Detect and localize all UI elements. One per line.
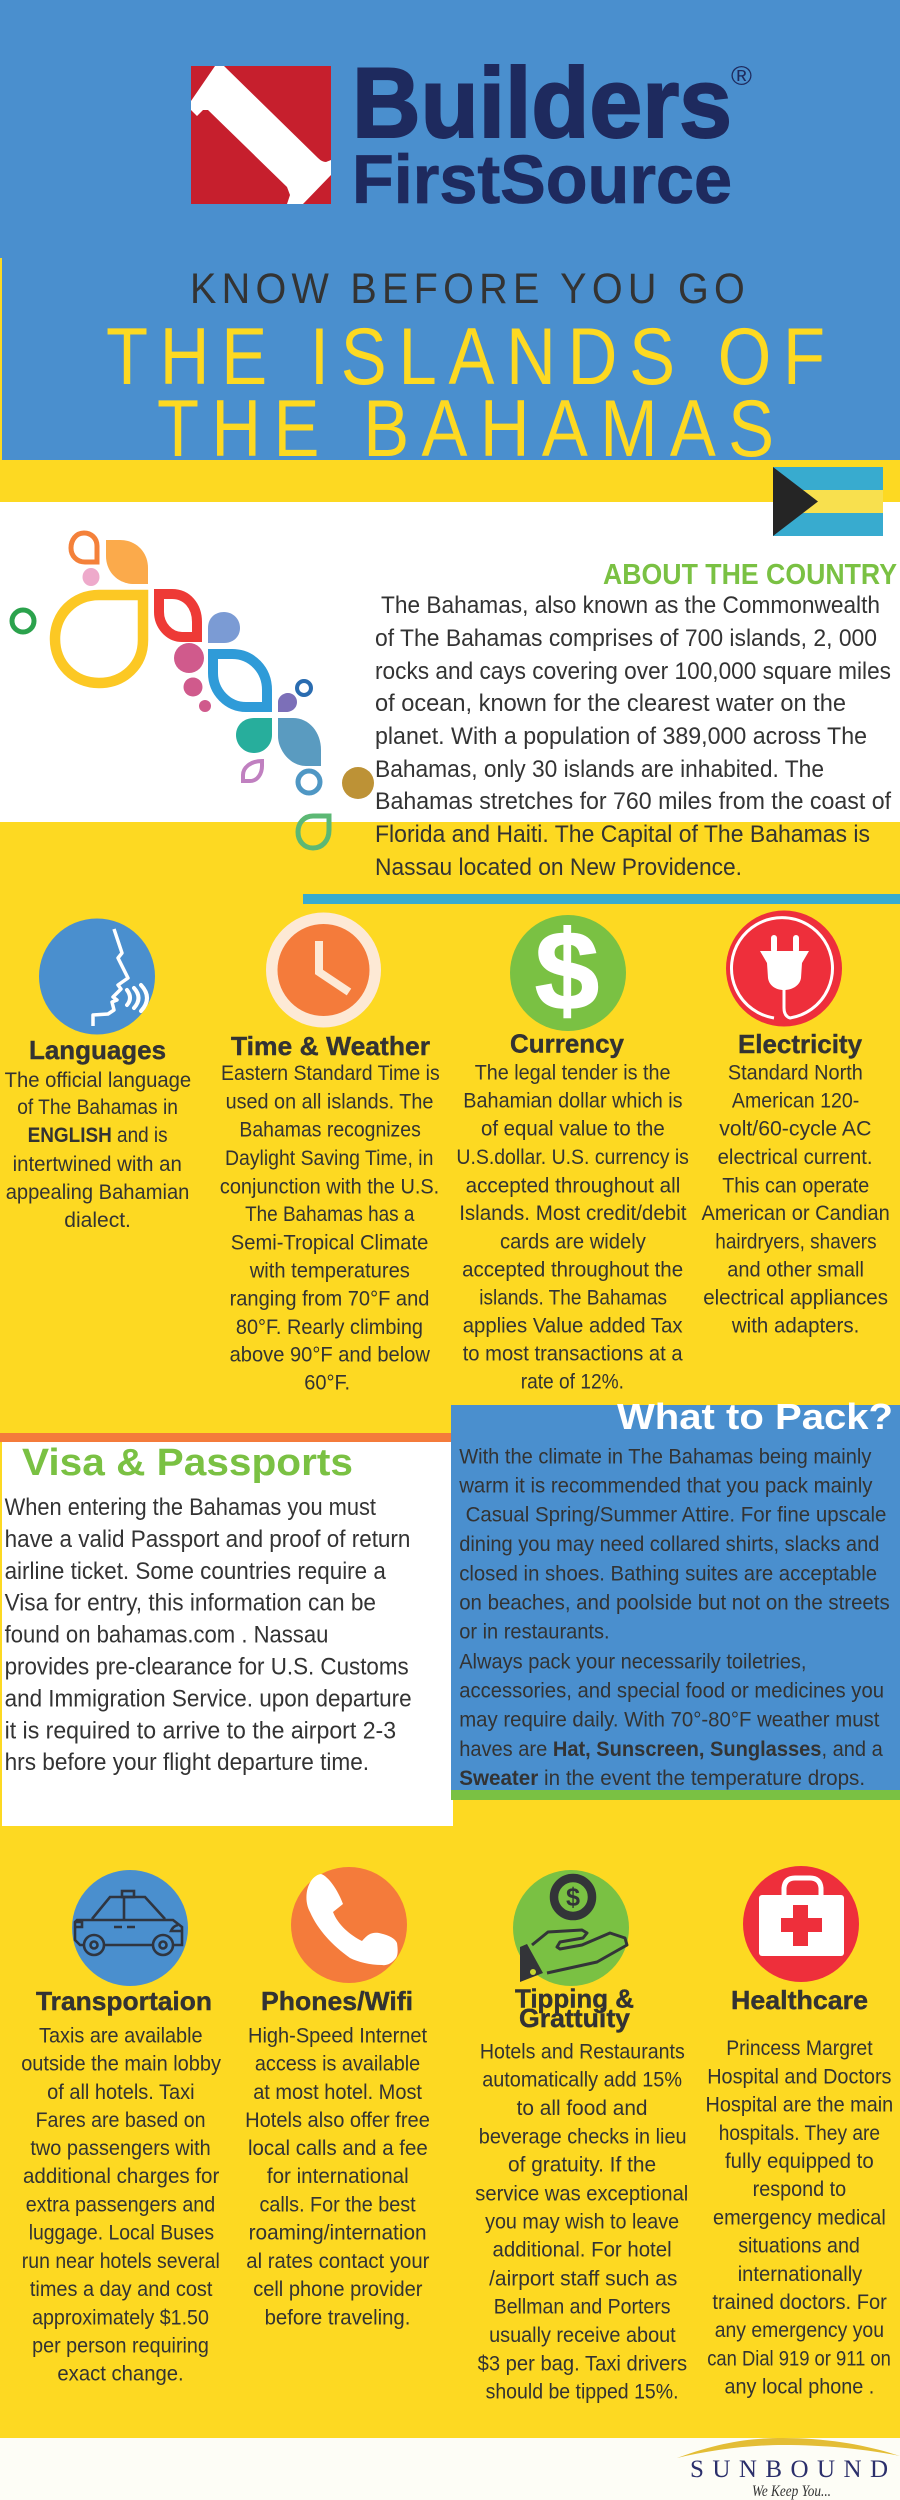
text: tipping body xyxy=(475,2040,688,2404)
text: tipping body: Hotels and Restaurants xyxy=(480,2040,685,2064)
text: transportation body: of all hotels. Taxi xyxy=(47,2081,195,2104)
panel: visa and passports xyxy=(0,1433,453,1826)
text: electricity body: American 120- xyxy=(732,1089,859,1112)
text: packing body: warm it is recommended that you pack mainly xyxy=(458,1474,873,1498)
heading: tipping and gratuity: Grattuity xyxy=(519,2003,631,2033)
text: currency body: of equal value to the xyxy=(481,1118,665,1141)
text: healthcare body: internationally xyxy=(738,2263,863,2286)
text: visa body: and Immigration Service. upon departure xyxy=(5,1685,412,1712)
heading: time and weather: Time & Weather xyxy=(231,1031,430,1061)
text: phones body: before traveling. xyxy=(265,2306,410,2329)
text: languages body: ENGLISH and is xyxy=(28,1124,168,1147)
text: packing body: accessories, and special food or medicines you xyxy=(459,1678,884,1702)
text: electricity body: electrical appliances xyxy=(703,1286,888,1309)
text: transportation body: Taxis are available xyxy=(39,2024,203,2047)
text: electricity body: with adapters. xyxy=(731,1315,859,1338)
text: healthcare body: emergency medical xyxy=(713,2206,886,2229)
text: phones body: calls. For the best xyxy=(260,2194,416,2216)
text: electricity body: electrical current. xyxy=(718,1146,873,1169)
text: time and weather body: used on all islands. The xyxy=(226,1090,433,1113)
text: visa body xyxy=(5,1494,412,1776)
text: packing body: Always pack your necessarily toiletries, xyxy=(459,1649,806,1673)
text: phones body: Hotels also offer free xyxy=(245,2109,430,2132)
text: electricity body: Standard North xyxy=(728,1061,863,1084)
logo: Sunbound xyxy=(677,2438,900,2500)
text: transportation body: outside the main lobby xyxy=(21,2053,221,2076)
icon: first aid kit xyxy=(743,1866,859,1982)
text: currency body: U.S.dollar. U.S. currency is xyxy=(456,1146,689,1169)
text: currency body: accepted throughout the xyxy=(462,1258,683,1281)
text: packing body xyxy=(458,1444,890,1790)
text: time and weather body: Bahamas recognizes xyxy=(239,1119,421,1142)
text: transportation body: Fares are based on xyxy=(36,2109,205,2132)
icon: Bahamas flag xyxy=(773,467,883,536)
text: about paragraph: of The Bahamas comprises of 700 islands, 2, 000 xyxy=(375,625,877,652)
heading: languages: Languages xyxy=(29,1035,166,1065)
text: transportation body: times a day and cost xyxy=(30,2278,213,2301)
panel: electricity xyxy=(702,910,890,1338)
heading: what to pack: What to Pack? xyxy=(617,1396,893,1437)
text: currency body: to most transactions at a xyxy=(463,1343,683,1366)
text: about paragraph: of ocean, known for the clearest water on the xyxy=(375,690,846,717)
logo mark xyxy=(191,66,331,204)
icon: clock xyxy=(266,912,381,1028)
text: time and weather body: Eastern Standard Time is xyxy=(221,1062,440,1085)
panel: tipping and gratuity xyxy=(475,1870,688,2404)
text: about paragraph: planet. With a population of 389,000 across The xyxy=(375,723,867,750)
text: phones body: High-Speed Internet xyxy=(248,2024,427,2047)
text: tipping body: to all food and xyxy=(517,2097,648,2120)
logo wordmark: Builders xyxy=(352,47,732,158)
text: tipping body: of gratuity. If the xyxy=(508,2154,656,2177)
text: transportation body: extra passengers and xyxy=(26,2194,215,2216)
text: packing body: Sweater in the event the temperature drops. xyxy=(459,1766,865,1790)
text: electricity body: volt/60-cycle AC xyxy=(719,1118,871,1141)
text: phones body: cell phone provider xyxy=(253,2278,422,2301)
text: healthcare body: any emergency you xyxy=(715,2319,884,2342)
text: about paragraph: Florida and Haiti. The Capital of The Bahamas is xyxy=(375,821,870,848)
text: about paragraph: The Bahamas, also known as the Commonwealth xyxy=(381,592,880,619)
text: visa body: it is required to arrive to the airport 2-3 xyxy=(5,1717,396,1744)
text: languages body: The official language xyxy=(5,1069,191,1092)
text: languages body xyxy=(5,1069,191,1232)
text: visa body: Visa for entry, this information can be xyxy=(5,1590,376,1617)
text: visa body: provides pre-clearance for U.S. Customs xyxy=(5,1654,409,1681)
text: transportation body: two passengers with xyxy=(30,2137,211,2160)
text: about paragraph: Nassau located on New Providence. xyxy=(375,854,742,881)
text: tipping body: usually receive about xyxy=(489,2324,676,2347)
text: time and weather body: above 90°F and below xyxy=(230,1344,431,1367)
text: time and weather body: with temperatures xyxy=(249,1260,410,1283)
text: currency body: Islands. Most credit/debit xyxy=(459,1202,687,1225)
logo wordmark xyxy=(352,47,752,218)
text: packing body: Casual Spring/Summer Attire. For fine upscale xyxy=(466,1503,886,1527)
text: healthcare body: situations and xyxy=(738,2235,860,2258)
text: healthcare body: fully equipped to xyxy=(725,2150,874,2173)
icon: dollar sign xyxy=(510,908,626,1033)
panel: transportation xyxy=(21,1870,221,2386)
text: phones body: access is available xyxy=(255,2053,420,2076)
text: healthcare body: Princess Margret xyxy=(726,2037,873,2060)
text: phones body: al rates contact your xyxy=(246,2250,429,2273)
title xyxy=(106,264,825,473)
text: phones body xyxy=(245,2024,430,2329)
text: electricity body: American or Candian xyxy=(702,1202,890,1225)
text: currency body: applies Value added Tax xyxy=(463,1315,683,1338)
text: transportation body: approximately $1.50 xyxy=(32,2306,209,2329)
panel: phones and wifi xyxy=(245,1867,430,2329)
text: currency body: rate of 12%. xyxy=(521,1371,624,1394)
heading: visa and passports: Visa & Passports xyxy=(22,1442,353,1484)
text: currency body: Bahamian dollar which is xyxy=(463,1089,683,1112)
text: packing body: dining you may need collared shirts, slacks and xyxy=(459,1532,879,1556)
text: tipping body: Bellman and Porters xyxy=(494,2296,670,2318)
text: visa body: found on bahamas.com . Nassau xyxy=(5,1621,328,1648)
title: KNOW BEFORE YOU GO xyxy=(190,264,745,312)
icon: phone handset xyxy=(291,1867,407,1983)
logo: Builders FirstSource xyxy=(191,47,752,218)
text: packing body: on beaches, and poolside but not on the streets xyxy=(459,1591,890,1615)
icon: hand holding coin xyxy=(513,1870,629,1986)
text: phones body: at most hotel. Most xyxy=(253,2081,422,2104)
text: languages body: intertwined with an xyxy=(13,1153,182,1176)
text: currency body: islands. The Bahamas xyxy=(479,1286,667,1309)
panel: healthcare xyxy=(706,1866,893,2398)
text: healthcare body: respond to xyxy=(753,2178,846,2201)
text: currency body: cards are widely xyxy=(500,1230,646,1253)
text: visa body: hrs before your flight departure time. xyxy=(5,1749,369,1776)
text: transportation body: run near hotels several xyxy=(22,2250,220,2273)
text: healthcare body: trained doctors. For xyxy=(712,2291,887,2314)
panel: about the country xyxy=(375,559,897,881)
panel: time and weather xyxy=(220,912,440,1394)
text: languages body: dialect. xyxy=(64,1209,131,1232)
text: healthcare body: Hospital and Doctors xyxy=(707,2065,892,2088)
text: about paragraph: Bahamas, only 30 islands are inhabited. The xyxy=(375,756,824,783)
panel: languages xyxy=(5,918,191,1232)
heading: transportation: Transportaion xyxy=(36,1986,212,2016)
heading: tipping and gratuity: Tipping & xyxy=(515,1984,634,2014)
text: tipping body: $3 per bag. Taxi drivers xyxy=(478,2352,687,2375)
text: tipping body: service was exceptional xyxy=(475,2182,688,2205)
heading: currency: Currency xyxy=(510,1029,625,1059)
text: transportation body: exact change. xyxy=(57,2363,184,2386)
text: currency body xyxy=(456,1061,689,1394)
text: electricity body: This can operate xyxy=(722,1174,869,1197)
text: transportation body: per person requiring xyxy=(32,2334,209,2358)
title: THE ISLANDS OF xyxy=(106,311,825,401)
text: transportation body xyxy=(21,2024,221,2386)
text: phones body: roaming/internation xyxy=(249,2222,427,2245)
text: phones body: local calls and a fee xyxy=(248,2137,428,2160)
text: languages body: appealing Bahamian xyxy=(6,1181,189,1204)
text: visa body: airline ticket. Some countries require a xyxy=(5,1558,386,1585)
heading: healthcare: Healthcare xyxy=(731,1985,868,2015)
icon: plug xyxy=(726,910,842,1026)
heading: electricity: Electricity xyxy=(738,1029,863,1059)
text: visa body: When entering the Bahamas you must xyxy=(5,1494,376,1521)
text: healthcare body: Hospital are the main xyxy=(706,2094,893,2117)
icon: speaking head xyxy=(39,918,155,1034)
text: time and weather body xyxy=(220,1062,440,1394)
text: packing body: haves are Hat, Sunscreen, Sunglasses, and a xyxy=(459,1737,883,1761)
text: healthcare body: hospitals. They are xyxy=(719,2122,880,2145)
text: time and weather body: conjunction with the U.S. xyxy=(220,1175,439,1198)
icon: taxi xyxy=(72,1870,188,1986)
heading: tipping and gratuity xyxy=(515,1984,634,2033)
text: transportation body: luggage. Local Buses xyxy=(29,2222,214,2245)
text: visa body: have a valid Passport and proof of return xyxy=(5,1526,410,1553)
text: time and weather body: Semi-Tropical Climate xyxy=(231,1231,428,1254)
text: healthcare body xyxy=(706,2037,893,2398)
text: electricity body xyxy=(702,1061,890,1338)
text: currency body: accepted throughout all xyxy=(466,1174,680,1197)
text: healthcare body: any local phone . xyxy=(724,2376,874,2398)
logo wordmark: ® xyxy=(731,61,752,91)
logo wordmark: FirstSource xyxy=(352,141,732,218)
text: packing body: closed in shoes. Bathing suites are acceptable xyxy=(459,1561,877,1585)
text: electricity body: and other small xyxy=(727,1258,864,1281)
text: tipping body: /airport staff such as xyxy=(489,2267,677,2290)
text: packing body: With the climate in The Bahamas being mainly xyxy=(459,1444,872,1468)
text: tipping body: should be tipped 15%. xyxy=(486,2380,678,2404)
text: tipping body: you may wish to leave xyxy=(485,2210,679,2234)
logo: Sunbound: SUNBOUND xyxy=(690,2456,888,2483)
text: currency body: The legal tender is the xyxy=(475,1061,670,1084)
text: about paragraph: Bahamas stretches for 760 miles from the coast of xyxy=(375,788,891,815)
text: languages body: of The Bahamas in xyxy=(17,1096,178,1119)
heading: phones and wifi: Phones/Wifi xyxy=(261,1986,413,2016)
text: phones body: for international xyxy=(267,2165,409,2188)
title: THE BAHAMAS xyxy=(157,383,774,473)
text: tipping body: automatically add 15% xyxy=(482,2069,682,2092)
text: about paragraph xyxy=(375,592,891,881)
text: packing body: may require daily. With 70°-80°F weather must xyxy=(459,1708,879,1732)
text: time and weather body: The Bahamas has a xyxy=(245,1203,415,1226)
text: tipping body: additional. For hotel xyxy=(492,2239,672,2262)
text: transportation body: additional charges for xyxy=(23,2165,219,2188)
text: electricity body: hairdryers, shavers xyxy=(715,1230,877,1253)
text: time and weather body: ranging from 70°F and xyxy=(230,1288,429,1311)
text: packing body: or in restaurants. xyxy=(459,1620,610,1644)
text: time and weather body: 80°F. Rearly climbing xyxy=(236,1316,423,1339)
text: tipping body: beverage checks in lieu xyxy=(479,2126,687,2148)
icon: dollar sign: $ xyxy=(535,908,599,1033)
icon: hand holding coin: $ xyxy=(566,1882,581,1912)
logo: Sunbound: We Keep You... xyxy=(752,2483,831,2500)
panel: currency xyxy=(456,908,689,1394)
text: time and weather body: 60°F. xyxy=(304,1371,350,1394)
text: time and weather body: Daylight Saving Time, in xyxy=(225,1147,433,1170)
illustration: map of the islands xyxy=(12,533,374,848)
panel: what to pack xyxy=(451,1396,900,1800)
